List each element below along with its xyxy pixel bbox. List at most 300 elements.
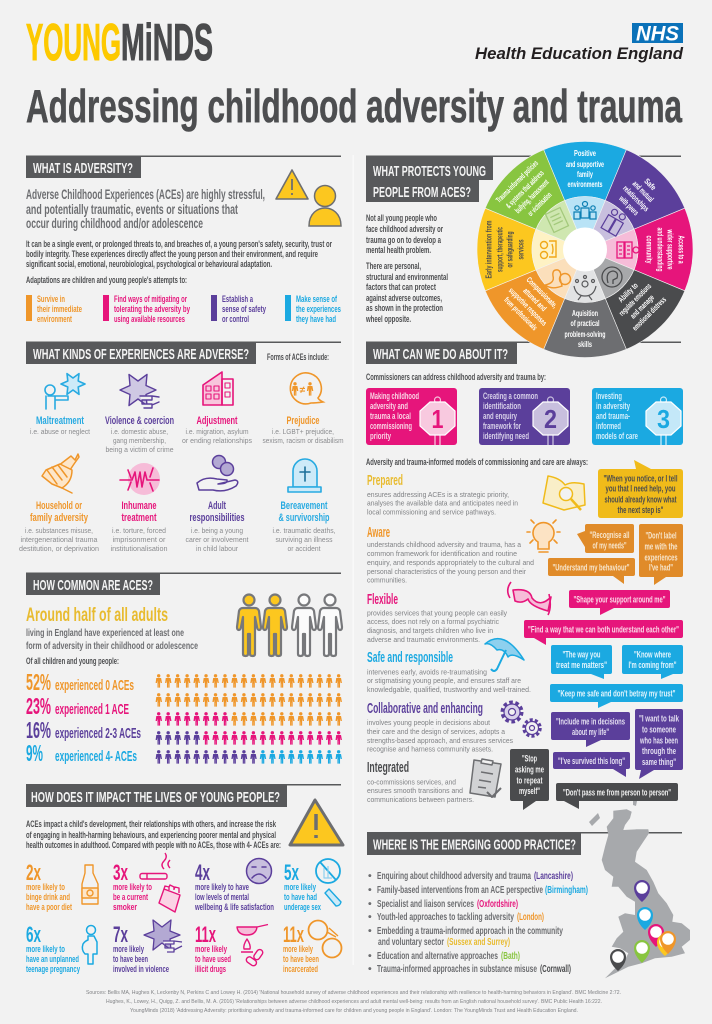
panel: what can we do [366,342,683,810]
heading: what can we do [366,342,681,364]
quote bubble: want to talk [635,709,683,779]
item: maltreatment [30,415,90,436]
stat: 11x drugs [195,922,231,975]
list: good practice locations: (Birmingham) [545,884,588,896]
principle: flexible [367,591,507,644]
stats list [26,669,141,766]
quote bubble: do not label: experiences [644,552,678,564]
list: good practice locations: Education and alternative approaches [377,950,498,962]
principle: prepared: ensures addressing ACEs is a strategic priority, [367,490,509,499]
list: adaptations: Make sense of [296,294,338,305]
item: household or family adversity: Household or [36,500,82,512]
wheel segment: regulate emotions: regulate emotions [617,281,653,318]
stat: 6x: teenage pregnancy [26,964,80,975]
stat: 11x drugs: more likely [195,944,227,955]
heading: impact: HOW DOES IT IMPACT THE LIVES OF YOUNG PEOPLE? [31,789,280,806]
card 2: identifying need [483,431,529,442]
item: adult responsibilities: i.e. being a young [191,528,243,535]
quote bubble: want to talk: through the [642,746,676,757]
item: maltreatment: Maltreatment [36,415,84,427]
stat: 11x drugs: to have used [195,954,231,965]
heading: how common: HOW COMMON ARE ACES? [33,577,153,594]
card 1: priority [370,431,391,442]
quote bubble: stop asking: myself" [519,786,540,797]
logo: YoungMinds: MiNDS [121,14,213,72]
principle: prepared [367,472,518,516]
principle: collaborative and enhancing: involves young people in decisions about [367,718,491,727]
list: good practice locations: Family-based interventions from an ACE perspective [377,884,543,896]
quote bubble: want to talk: "I want to talk [639,714,679,724]
stats list: experienced 1 ACE [55,701,129,718]
card 2: identification [483,401,521,412]
wheel segment: early intervention: or safeguarding [506,231,514,268]
card 3: Investing [596,391,622,402]
text: around half of all adults: Around half of all adults [26,605,168,626]
quote bubble: understand: "Understand my behaviour" [552,562,630,574]
principle: integrated: ensures smooth transitions and [367,786,463,795]
quote bubble: way you treat me: "The way you [562,650,601,660]
card 1: commissioning [370,421,412,432]
list: adaptations: environment [37,314,73,325]
wheel icon: peers [601,208,627,236]
stat: 11x drugs: illicit drugs [195,964,226,975]
heading: what is adversity [26,156,341,178]
wheel segment: trauma-informed policies: Trauma-informed policies [494,158,540,205]
quote bubble: do not label: I've had" [649,562,673,574]
quote bubble: next step [598,460,683,518]
logo: NHS Health Education England: Health Education England [475,44,684,63]
quote bubble: include me: about my life" [572,727,609,738]
item: adjustment: i.e. migration, asylum [186,429,249,436]
stat: 7x: involved in violence [113,964,169,975]
quote bubble: stop asking: to repeat [516,776,543,786]
icon: spoon flame pills [237,924,268,967]
wheel segment: community: and understanding [656,228,664,272]
icon: burst and fist [144,920,182,952]
principle: safe and responsible: or stigmatising young people, and ensures staff are [367,676,521,685]
list: adaptations: sense of safety [222,304,266,315]
logo: NHS Health Education England [475,22,684,63]
wheel segment: problem-solving: Aquisition [572,309,598,318]
wheel segment: safe relationships: relationships [621,184,651,214]
wheel icon: document [546,208,568,232]
principle: collaborative and enhancing [367,700,513,754]
list: good practice locations: • [368,925,372,937]
principle: flexible: access, does not rely on a formal psychiatric [367,617,499,626]
principle: integrated: Integrated [367,759,409,776]
text: impact intro [26,819,281,850]
quote bubble: shape support [569,590,670,615]
sources: Sources: Bellis MA, Hughes K, Leckenby N, Perkins C and Lowey H. (2014) 'National household survey of adverse childhood experiences and their relationship with resilience to health-harming behaviors in England'. BMC Medicine 2:72. [86,990,621,996]
stats list: 9% [26,740,43,766]
list: good practice locations: Embedding a trauma-informed approach in the community [377,925,563,937]
item: violence and coercion: Violence & coercion [105,415,174,427]
item: maltreatment: i.e. abuse or neglect [30,429,90,436]
icon: barbed wire [120,463,160,495]
item: adult responsibilities [186,500,249,553]
list: good practice locations: (Oxfordshire) [477,898,518,910]
icon: handcuffs [308,920,342,958]
icon: prejudice [290,373,323,404]
icon: book and magnifier [543,476,585,510]
stat: 11x incarcerated: to have been [283,954,319,965]
panel: how does it impact [26,784,343,975]
principle: aware: common framework for identification and routine [367,549,517,558]
item: prejudice: sexism, racism or disabilism [262,438,344,445]
principle: aware: understands childhood adversity and trauma, has a [367,540,522,549]
heading: what protects: PEOPLE FROM ACES? [373,184,471,201]
item: inhumane treatment: i.e. torture, forced [112,528,166,535]
stat: 3x: 3x [113,860,128,885]
panel: what protects young people [365,156,681,324]
card 1: trauma a local [370,411,411,422]
item: prejudice [262,415,344,445]
wheel segment: trauma-informed policies: bullying, harassment [513,178,551,215]
quote bubble: stop asking: "Stop [522,754,537,764]
stat: 4x: more likely to have [195,882,249,893]
text: around half of all adults: living in England have experienced at least one [26,628,184,639]
list: good practice locations: Specialist and liaison services [377,898,474,910]
logo: NHS Health Education England: NHS [636,22,679,46]
quote bubble: do not pass me [556,783,678,809]
stat: 5x [284,860,321,913]
card 2: Creating a common [483,391,538,402]
principle: flexible: provides services that young people can easily [367,608,507,618]
stat: 11x incarcerated: incarcerated [283,964,318,975]
icon: cigarettes [140,853,180,912]
item: violence and coercion: being a victim of crime [106,447,174,454]
stat: 2x: have a poor diet [26,902,73,913]
card 3: informed [596,421,621,432]
quote bubble: know where: I'm coming from" [628,660,676,671]
list: adaptations: the experiences [296,304,341,315]
icon: four adult figures [237,594,342,656]
heading: impact [26,784,341,807]
card 3: and trauma- [596,411,630,422]
heading: good practice: WHERE IS THE EMERGING GOOD PRACTICE? [373,836,576,854]
quote bubble: recognise: of my needs" [592,540,626,552]
card 2: 2 [544,404,557,434]
principle: prepared: analyses the available data and anticipates need in [367,498,518,508]
list: adaptations [26,294,341,325]
wheel icon: community buildings [617,242,639,258]
stats list: experienced 4- ACEs [55,748,137,765]
icon: hourglass bow [508,582,551,615]
list: adaptations: tolerating the adversity by [114,304,190,315]
stat: 5x: to have had [284,892,317,903]
text: impact intro: health outcomes in adulthood. Compared with people with no ACEs, those with 4- ACEs are: [26,840,281,850]
quote bubble: survived: "I've survived this long" [558,756,625,767]
item: household or family adversity: family adversity [30,512,89,524]
card 2: and enquiry [483,411,517,422]
stat: 11x incarcerated: 11x [283,922,304,947]
principle: safe and responsible [367,649,531,694]
item: adjustment [182,415,252,445]
wheel segment: family environments: and supportive [566,160,604,169]
text: protects intro: face childhood adversity or [366,224,443,234]
panel: what kinds of experiences are adverse [19,342,344,553]
quote bubble: understand [548,558,635,584]
wheel icon: regulate [602,267,622,287]
icon: umbrella [485,639,524,671]
item: violence and coercion: i.e. domestic abuse, [111,429,168,436]
stat: 2x [26,860,73,913]
principle: aware: Aware [367,524,390,541]
text: protects intro: trauma go on to develop a [366,235,442,245]
item: adult responsibilities: in child labour [196,546,239,553]
icon: no underage sex [316,859,341,906]
wheel segment: problem-solving [564,309,606,349]
text: around half of all adults [26,605,198,666]
item: prejudice: Prejudice [286,415,320,427]
principle: flexible: adverse and traumatic environments. [367,635,480,644]
card 2: framework for [483,421,521,432]
quote bubble: stop asking [510,749,549,810]
list: adaptations: Establish a [222,294,253,305]
wheel icon: juggling [574,276,596,300]
wheel segment: trauma-informed policies [494,158,563,227]
item: adult responsibilities: Adult [208,500,226,512]
text: protects intro: Not all young people who [366,213,437,223]
text: protects intro: factors that can protect [366,282,436,292]
text: protects intro [365,213,448,324]
text: protects intro: mental health problem. [366,245,431,255]
wheel segment: safe relationships: Safe [642,177,658,193]
quote bubble: recognise: "Recognise all [590,530,630,541]
list: good practice locations: • [368,963,372,975]
stat: 3x: be a current [113,892,149,903]
stat: 5x: 5x [284,860,299,885]
item: violence and coercion: gang membership, [113,438,166,445]
list: adaptations: their immediate [37,304,82,315]
principle: aware: personal characteristics of the young person and their [367,567,526,576]
text: models intro: Adversity and trauma-informed models of commissioning and care are always: [366,457,588,467]
item: violence and coercion [105,415,174,454]
list: good practice locations: • [368,884,372,896]
list: adaptations: or control [222,314,249,325]
stat: 5x: more likely [284,882,316,893]
stats list: experienced 2-3 ACEs [55,725,141,742]
item: household or family adversity: destitution, or deprivation [19,546,99,553]
wheel segment: community [644,228,686,272]
wheel segment: safe relationships [614,170,665,221]
principle: safe and responsible: Safe and responsible [367,649,453,666]
principle: flexible: Flexible [367,591,398,608]
card 3: 3 [657,404,670,434]
principle: collaborative and enhancing: strengths-based approach, and ensures services [367,736,513,745]
wheel segment: family environments: family [577,170,593,179]
quote bubble: next step: the next step is" [618,505,664,516]
item: prejudice: i.e. LGBT+ prejudice, [272,429,334,436]
quote bubble: way you treat me [551,645,612,679]
quote bubble: keep me safe [550,684,683,708]
heading: kinds of experiences: Forms of ACEs include: [267,352,329,362]
list: adaptations: using available resources [114,314,185,325]
wheel segment: community: wider supportive [666,229,674,270]
principle: aware: enquiry, and responds appropriately to the cultural and [367,558,534,567]
item: adult responsibilities: carer or involvement [186,537,249,544]
list: adaptations: Find ways of mitigating or [114,294,187,305]
wheel segment: early intervention: services [516,239,526,260]
quote bubble: include me [551,712,630,747]
text: body [26,239,332,285]
quote bubble: stop asking: asking me [515,764,544,776]
list: good practice locations: (Lancashire) [534,870,573,882]
uk map [589,801,690,978]
stat: 7x: to have been [113,954,148,965]
list: good practice locations: (London) [517,911,544,923]
icon: violence [120,374,159,408]
pictogram: 100 people [156,674,342,764]
list: good practice locations: Youth-led approaches to tackling adversity [377,911,514,923]
card 1 [366,388,457,445]
principle: aware [367,524,534,584]
text: body: It can be a single event, or prolonged threats to, and breaches of, a young person's safety, security, trust or [26,239,332,249]
stat: 3x: smoker [113,902,137,913]
wheel segment: compassionate responses [500,272,563,335]
text: around half of all adults: form of adversity in their childhood or adolescence [26,641,198,652]
wheel segment: problem-solving: of practical [570,319,600,328]
icon: maltreatment [45,374,85,409]
sources: Hughes, K., Lowey, H., Quigg, Z. and Bellis, M. A. (2016) 'Relationships between adverse childhood experiences and adult mental well-being: results from an English national household survey'. BMC Public Health 16:222. [106,999,602,1005]
list: good practice locations [368,870,588,975]
list: adaptations: they have had [296,314,336,325]
principle: integrated: communications between partners. [367,795,474,804]
list: good practice locations: (Sussex and Surrey) [447,936,510,948]
card 3: models of care [596,431,638,442]
stat: 7x: more likely [113,944,144,955]
quote bubble: do not label [639,524,683,585]
text: protects intro: against adverse outcomes, [366,293,442,303]
stat: 4x: wellbeing & life satisfaction [194,902,274,913]
wheel segment: regulate emotions: emotional distress [631,295,668,333]
item: household or family adversity [19,500,99,553]
wheel segment: family environments: Positive [574,149,596,158]
sources [86,990,621,1014]
item: bereavement and survivorship: surviving an illness [276,537,333,544]
item: bereavement and survivorship: Bereavement [280,500,328,512]
wheel segment: early intervention [484,220,526,278]
quote bubble: do not label: me with the [644,542,678,552]
heading: kinds of experiences [26,342,341,364]
icon: adjustment [203,372,233,405]
text: protects intro: There are personal, [366,261,421,271]
item: bereavement and survivorship: or accident [288,546,321,553]
quote bubble: know where [622,645,683,679]
stat: 7x: 7x [113,922,128,947]
text: protects intro: as shown in the protection [366,303,443,313]
wheel segment: family environments [566,149,604,189]
card 1: adversity and [370,401,408,412]
principle: integrated [367,759,474,804]
item: adjustment: or ending relationships [182,438,252,445]
wheel segment: problem-solving: skills [578,340,592,349]
list: good practice locations: Trauma-informed approaches in substance misuse [377,963,537,975]
item: inhumane treatment: Inhumane [122,500,156,512]
list: good practice locations: • [368,870,372,882]
quote bubble: survived [553,752,630,777]
item: bereavement and survivorship [272,500,336,553]
stat: 4x: low levels of mental [195,892,249,903]
text: lead statement [26,186,265,231]
wheel segment: community: community [644,236,654,264]
wheel segment: safe relationships: with peers [617,194,641,218]
heading: what can we do: WHAT CAN WE DO ABOUT IT? [373,346,508,363]
text: lead statement: and potentially traumatic, events or situations that [26,201,238,217]
principle: collaborative and enhancing: recognise and harness community assets. [367,744,493,754]
stat: 11x incarcerated: more likely [283,944,313,955]
text: commissioners: Commissioners can address childhood adversity and trauma by: [366,372,546,382]
stat: 2x: more likely to [26,882,65,893]
quote bubble: do not label: "Don't label [646,530,676,542]
quote bubble: way you treat me: treat me matters" [556,660,607,671]
panel: how common are aces [26,572,342,766]
icon: warning person [276,170,341,226]
stat: 6x: 6x [26,922,41,947]
stat: 5x: underage sex [284,902,321,913]
item: household or family adversity: intergenerational trauma [20,537,98,544]
quote bubble: include me: "Include me in decisions [556,716,625,728]
list: good practice locations: • [368,911,372,923]
heading: good practice [367,833,581,855]
item: inhumane treatment [110,500,168,553]
list: good practice locations: (Cornwall) [540,963,571,975]
wheel segment: regulate emotions: and manage [628,293,656,321]
quote bubble: recognise [577,524,634,553]
principle: prepared: local commissioning and service pathways. [367,508,496,516]
text: body: bodily integrity. These experiences directly affect the young person and their environment, and require [26,249,318,259]
wheel segment: safe relationships: and mutual [631,179,655,204]
principle: collaborative and enhancing: their care and the design of services, adopts a [367,727,506,736]
icon: coins in hand [197,456,238,491]
quote bubble: know where: "Know where [634,650,671,660]
icon: warning triangle [290,800,343,845]
item: household or family adversity: i.e. substances misuse, [25,528,93,535]
item: inhumane treatment: institutionalisation [110,546,168,553]
sources: YoungMinds (2018) 'Addressing Adversity: prioritising adversity and trauma-informed care for children and young people in England'. London: The YoungMinds Trust and Health Education England. [130,1008,578,1014]
principle: aware: communities. [367,576,407,584]
wheel segment: compassionate responses: Compassionate, [525,275,559,310]
card 1: 1 [432,404,444,434]
text: body: Adaptations are children and young people's attempts to: [26,275,187,285]
list: good practice locations: • [368,898,372,910]
icon: clipboard [470,759,501,797]
principle: safe and responsible: intervenes early, avoids re-traumatising [367,668,487,676]
quote bubble: want to talk: same thing" [642,757,676,768]
text: protects intro: wheel opposite. [365,314,411,324]
wheel icon: people group [540,241,556,258]
stat: 7x [113,922,169,975]
text: protects intro: structural and environmental [366,272,448,282]
stats list: 16% [26,717,51,743]
icon: prejudice: ≠ [300,385,306,396]
stat: 3x: more likely to [113,882,152,893]
list: good practice locations: • [368,950,372,962]
item: bereavement and survivorship: & survivorship [278,512,330,524]
text: body: significant social, emotional, neurobiological, psychological or behavioural adaptation. [26,259,272,269]
principle: integrated: co-commissions services, and [367,778,456,786]
wheel segment: early intervention: Early intervention from [484,220,494,278]
stat: 11x drugs: 11x [195,922,216,947]
stat: 6x: more likely to [26,944,65,955]
heading: what is adversity: WHAT IS ADVERSITY? [33,160,133,177]
icon: tombstone [288,459,321,492]
stat: 2x: 2x [26,860,41,885]
quote bubble: want to talk: to someone [642,724,676,736]
panel: what is adversity [26,156,341,325]
item: adjustment: Adjustment [196,415,238,427]
wheel segment: trauma-informed policies: or victimisation [526,190,554,218]
